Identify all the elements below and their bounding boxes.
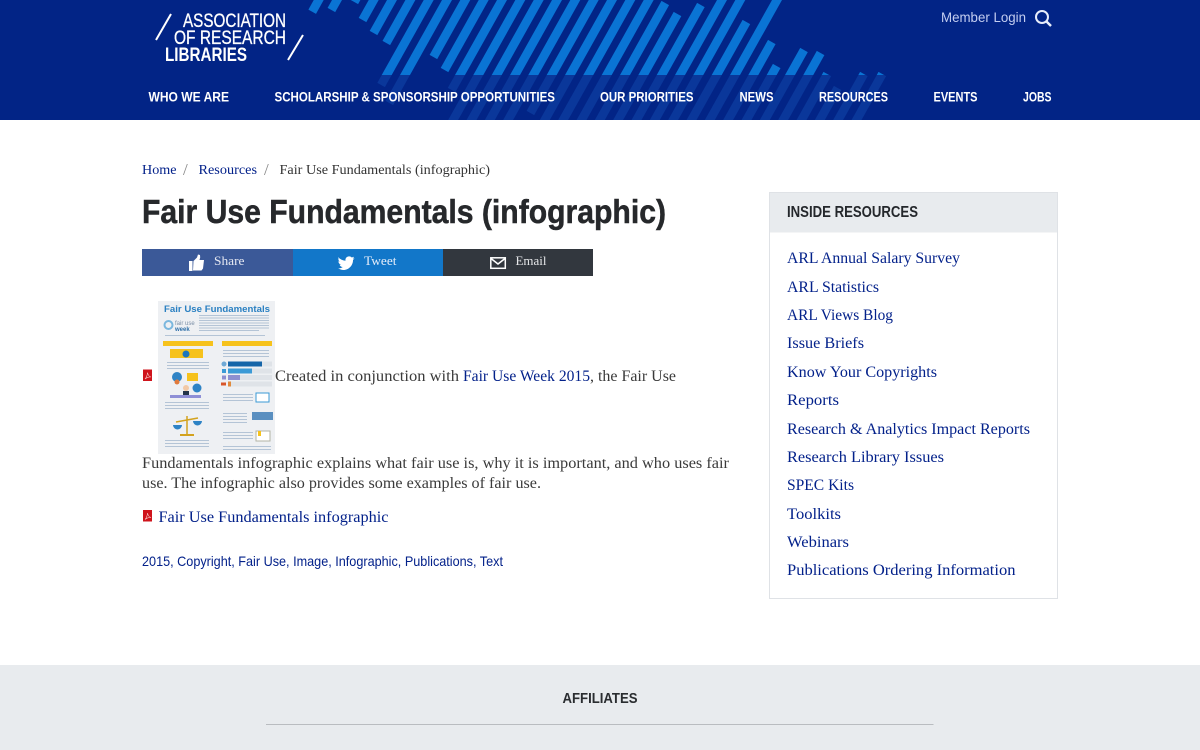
navigation: EVENTS [934,90,978,104]
sidebar links: Know Your Copyrights [787,364,937,381]
logo: OF RESEARCH [174,28,286,49]
thumbnail bar chart [221,362,272,386]
breadcrumb: / [264,160,269,179]
paragraph: use. The infographic also provides some examples of fair use. [142,475,541,492]
paragraph: Created in conjunction with [275,368,459,385]
header band [0,0,1200,122]
logo: LIBRARIES [165,45,247,66]
sidebar heading: INSIDE RESOURCES [787,204,918,221]
button: share [142,249,293,276]
navigation: JOBS [1023,90,1052,104]
icon: search [1036,11,1051,26]
sidebar links: ARL Statistics [787,279,879,296]
decorative stripe pattern lower [378,75,886,120]
tags: 2015, Copyright, Fair Use, Image, Infographic, Publications, Text [142,553,503,569]
logo: ASSOCIATION [183,11,286,32]
thumbnail banners [163,341,272,358]
share buttons [142,249,593,276]
button: tweet: Tweet [364,253,397,268]
sidebar links: SPEC Kits [787,477,854,494]
member login: Member Login [941,9,1026,25]
breadcrumb: Fair Use Fundamentals (infographic) [280,162,490,177]
button: email [443,249,593,276]
infographic thumbnail: week [174,327,190,333]
sidebar links: Research Library Issues [787,449,944,466]
sidebar links: Research & Analytics Impact Reports [787,421,1030,438]
infographic thumbnail [158,301,275,454]
sidebar links: ARL Annual Salary Survey [787,250,960,267]
navigation: WHO WE ARE [148,90,229,104]
thumbnail right icons [252,393,273,441]
sidebar links: Reports [787,392,839,409]
navigation [148,90,1052,104]
breadcrumb: Resources [198,162,257,177]
paragraph [142,368,730,492]
infographic thumbnail: Fair Use Fundamentals [164,304,270,315]
button: share: Share [214,253,245,268]
footer heading: AFFILIATES [562,690,638,707]
icon: pdf link [143,510,152,522]
sidebar links: Issue Briefs [787,335,864,352]
thumbnail scales [173,416,202,436]
paragraph: Fundamentals infographic explains what fair use is, why it is important, and who uses fair [142,455,730,472]
navigation: RESOURCES [819,90,888,104]
logo [156,11,303,66]
button: tweet [293,249,443,276]
sidebar links: Toolkits [787,506,841,523]
thumbnail intro lines [165,315,269,336]
paragraph: , the Fair Use [590,368,676,385]
navigation: NEWS [740,90,774,104]
sidebar links [787,250,1030,579]
thumbnail people [170,372,202,398]
breadcrumb [142,160,490,179]
navigation: SCHOLARSHIP & SPONSORSHIP OPPORTUNITIES [274,90,555,104]
footer band [0,665,1200,750]
button: email: Email [516,253,547,268]
sidebar links: ARL Views Blog [787,307,893,324]
sidebar links: Publications Ordering Information [787,562,1016,579]
icon: pdf [143,370,152,381]
breadcrumb: / [183,160,188,179]
navigation: OUR PRIORITIES [600,90,694,104]
decorative stripe pattern upper [308,0,884,75]
pdf download link: Fair Use Fundamentals infographic [158,509,388,526]
sidebar panel [770,192,1058,598]
infographic thumbnail: fair use [175,321,195,327]
sidebar links: Webinars [787,534,849,551]
sidebar heading [770,193,1057,232]
breadcrumb: Home [142,162,176,177]
paragraph: Fair Use Week 2015 [463,368,590,385]
title: Fair Use Fundamentals (infographic) [142,193,666,230]
